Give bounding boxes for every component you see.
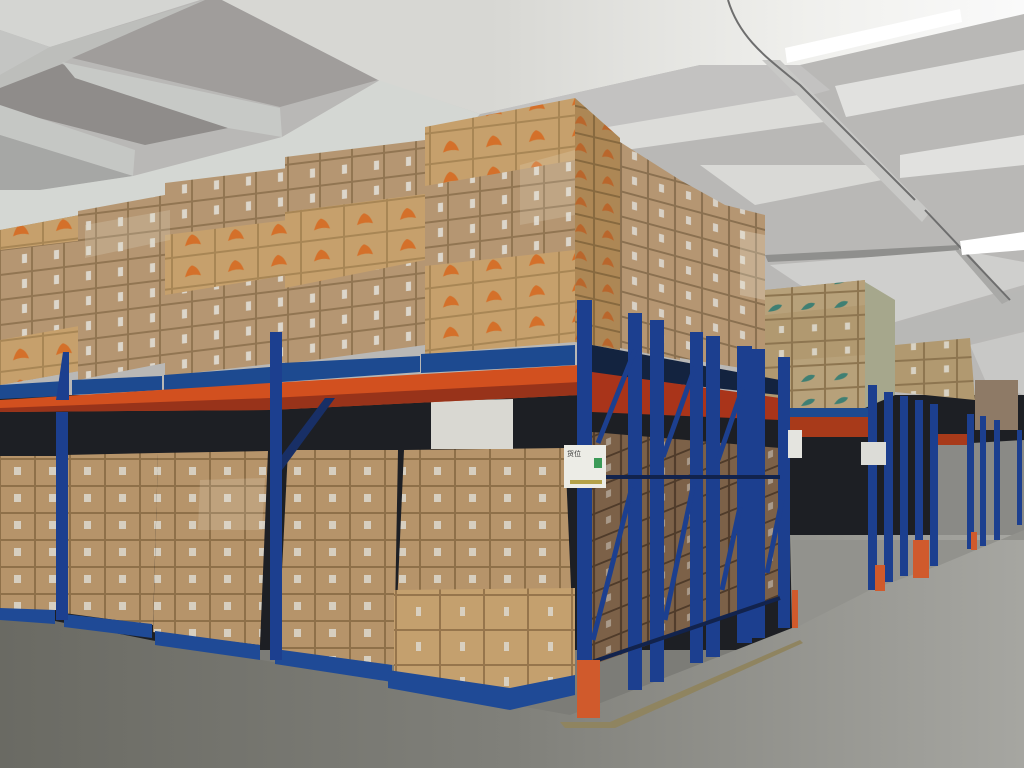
- ceiling: [0, 0, 1024, 420]
- lower stack: fourth: [278, 450, 398, 665]
- ceiling: first cross beam: [62, 62, 282, 137]
- right aisle uprights: [868, 385, 877, 590]
- lower boxes: [0, 399, 780, 690]
- yellow floor line: [560, 640, 803, 728]
- box stack: corner side face: [575, 98, 620, 350]
- ceiling: beam row B: [700, 165, 882, 205]
- horizontal braces: [592, 477, 780, 662]
- ceiling: central recess: [490, 65, 830, 130]
- shrink wrap highlight: right aisle: [740, 230, 765, 300]
- ceiling: bright central slab: [490, 0, 1024, 112]
- aisle sign: right: [861, 442, 886, 465]
- front beam: [0, 365, 580, 412]
- box stack: right aisle: [765, 280, 865, 408]
- box stack: corner front labelled band: [425, 160, 575, 266]
- ceiling: main beam: [222, 0, 490, 114]
- ceiling: deep recess: [890, 290, 1024, 345]
- box stack: right far: [895, 338, 975, 400]
- shrink wrap highlight: corner stack: [520, 150, 575, 225]
- upper cross braces: [282, 398, 335, 470]
- blue rack frames: [56, 300, 1022, 690]
- side beam: [592, 372, 780, 420]
- lower stack: second: [64, 453, 158, 625]
- rack sign: 货位: [567, 449, 581, 458]
- lower pallets: [0, 608, 575, 710]
- orange upright guards: [577, 532, 977, 718]
- white carton: [431, 399, 513, 449]
- box stack: far left: [0, 214, 85, 385]
- ceiling: beam row A: [590, 93, 824, 150]
- ceiling: second cross beam: [0, 105, 135, 176]
- ceiling: lower light band: [0, 80, 480, 250]
- box stack: fourth: [285, 140, 425, 364]
- lower stack: far left: [0, 456, 56, 610]
- back wall dark zone: [0, 395, 1024, 650]
- far aisle beam: [938, 434, 968, 445]
- shrink wrap highlight: second stack: [85, 210, 170, 258]
- rack sign: [564, 445, 606, 488]
- ceiling: third recess: [0, 135, 133, 190]
- box stack: deep row far: [680, 180, 765, 372]
- side beam dark structure: [592, 345, 780, 395]
- white wrap highlight: [198, 478, 265, 530]
- ceiling light: upper: [785, 9, 962, 63]
- orange beams: [0, 345, 968, 445]
- box stack: corner front logos: [425, 98, 575, 354]
- conduit tray: [762, 60, 930, 222]
- floor: [0, 535, 1024, 768]
- ceiling: top left beam: [0, 0, 200, 47]
- lower stack: aisle side: [592, 432, 780, 665]
- ceiling: beam row A right: [835, 50, 1024, 117]
- corner uprights: [577, 300, 592, 665]
- left uprights: [56, 352, 69, 400]
- upper pallets: [0, 345, 868, 417]
- ceiling: left recess: [72, 0, 378, 107]
- lower stack: third: [153, 451, 268, 645]
- ceiling: far beams: [770, 250, 1024, 322]
- box stack: third: [165, 168, 288, 376]
- lower stack: corner front: [394, 448, 575, 690]
- conduit pipe: [728, 0, 1010, 300]
- box stack: far end: [975, 380, 1018, 430]
- ceiling light: right: [960, 232, 1024, 255]
- box stack: right aisle side: [865, 282, 895, 408]
- lower stack: corner front tall cartons: [394, 588, 575, 690]
- far wall: [938, 440, 1024, 565]
- ceiling: beam row C: [765, 245, 960, 262]
- ceiling: second recess: [0, 64, 228, 145]
- aisle sign: middle: [788, 430, 802, 458]
- box stack: second: [78, 194, 170, 380]
- ceiling: beam row B right: [900, 135, 1024, 178]
- box stack: deep row: [620, 142, 680, 360]
- right aisle beam: [790, 417, 872, 437]
- diagonal braces: [593, 350, 782, 640]
- upper boxes: [0, 98, 1018, 430]
